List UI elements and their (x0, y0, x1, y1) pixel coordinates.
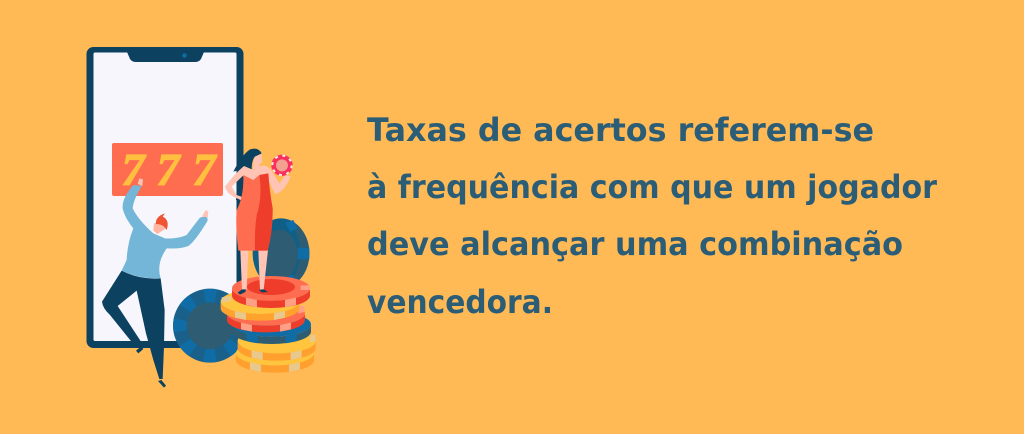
man's trousers (102, 271, 165, 379)
stack of chips (221, 276, 316, 373)
line 4: vencedora. (367, 283, 553, 321)
bottom orange chip (236, 341, 314, 373)
upper orange chip (238, 329, 316, 361)
slot machine 777 panel: 7 (122, 144, 146, 195)
line 2: à frequência com que um jogador (367, 168, 937, 206)
illustration: phone, players and casino chips (86, 47, 316, 388)
top red chip (232, 276, 310, 308)
woman's legs (240, 250, 268, 290)
middle red chip (227, 301, 305, 332)
yellow chip (221, 289, 299, 321)
blue chip (232, 312, 311, 344)
line 3: deve alcançar uma combinação (367, 225, 903, 263)
man's shoes (136, 346, 166, 388)
man's head (153, 221, 166, 234)
chip behind the woman (253, 218, 309, 288)
slot machine 777 panel (112, 143, 223, 196)
woman's red dress (236, 173, 273, 251)
man's hands (138, 178, 208, 217)
slot machine 777 panel: 7 (192, 144, 218, 195)
woman's hair (233, 149, 262, 202)
woman's shoes (238, 289, 268, 295)
slot machine 777 panel: 7 (156, 144, 182, 195)
man's hair (156, 213, 168, 230)
man celebrating (102, 178, 208, 388)
man's sweater (122, 185, 208, 278)
poker chip in hand (271, 155, 293, 176)
woman holding a chip (225, 149, 293, 295)
woman's arms and chest (225, 166, 291, 202)
line 1: Taxas de acertos referem-se (367, 111, 874, 149)
text: explanation of hit rates (367, 111, 937, 321)
woman's face (253, 154, 262, 170)
phone (86, 47, 244, 348)
large blue chip (173, 289, 247, 363)
